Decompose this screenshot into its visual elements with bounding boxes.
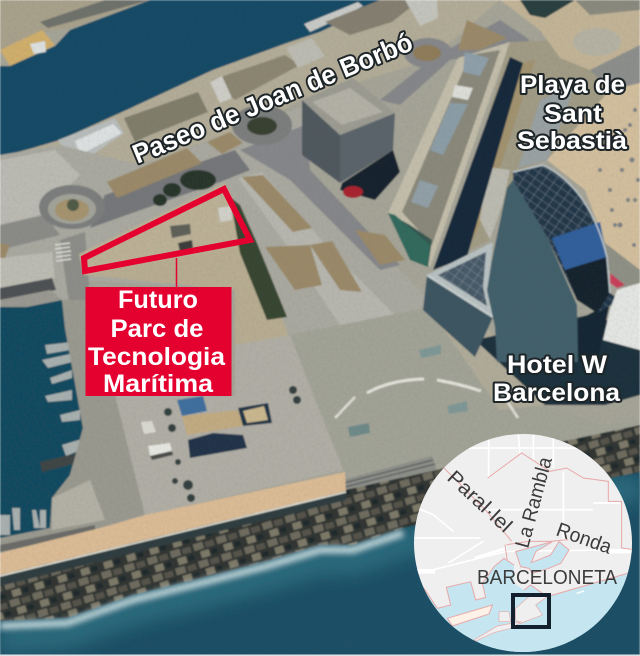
callout leader line (176, 258, 178, 288)
callout: Futuro Parc de Tecnologia Marítima: Parc de (110, 315, 204, 343)
sea wall shadow (0, 492, 346, 586)
callout: Futuro Parc de Tecnologia Marítima: Futuro (118, 286, 198, 314)
label: Playa de Sant Sebastià (517, 71, 627, 155)
callout: Futuro Parc de Tecnologia Marítima: Tecnologia (88, 343, 226, 371)
callout: Futuro Parc de Tecnologia Marítima: Marítima (103, 370, 214, 398)
cube building (302, 78, 400, 200)
long building (388, 42, 523, 270)
map district lines (444, 453, 633, 568)
map location square (513, 595, 549, 627)
label: Hotel W Barcelona: Hotel W (507, 351, 607, 379)
label: Playa de Sant Sebastià: Playa de (520, 71, 625, 99)
stepped ramp (342, 456, 437, 494)
map streets (414, 435, 640, 570)
label: Paseo de Joan de Borbó: Paseo de Joan de Borbó (128, 27, 417, 169)
map label: Paral·lel: Paral·lel (443, 467, 516, 537)
Hotel W podium (423, 242, 640, 405)
future park plot ground (79, 183, 290, 345)
red roof (610, 273, 625, 288)
main plaza (290, 305, 640, 475)
sea (0, 450, 640, 656)
white terrace (603, 283, 640, 350)
promenade (0, 472, 346, 575)
map label: La Rambla: La Rambla (512, 454, 557, 550)
north pier (0, 0, 150, 66)
lower quay (0, 300, 145, 553)
trees near the plot (153, 170, 216, 206)
locator map (414, 434, 640, 655)
label: Hotel W Barcelona: Barcelona (493, 379, 621, 407)
beach (547, 83, 640, 288)
tan planters (0, 20, 507, 292)
harbour water (0, 0, 387, 157)
surf glow (0, 490, 640, 640)
construction site at top right (500, 0, 640, 90)
bottom edge (0, 654, 640, 656)
map water (426, 559, 628, 652)
map label: BARCELONETA: BARCELONETA (477, 567, 618, 589)
label: Hotel W Barcelona (493, 351, 621, 407)
future park plot outline (84, 189, 250, 271)
parking area (115, 335, 345, 515)
palm promenade (445, 40, 640, 262)
waterfront buildings (0, 0, 500, 190)
map label: Ronda: Ronda (553, 519, 615, 559)
label: Playa de Sant Sebastià: Sant (544, 100, 603, 128)
roundabouts (39, 38, 452, 229)
marina water (0, 300, 90, 538)
yacht (304, 2, 363, 32)
label: Playa de Sant Sebastià: Sebastià (517, 127, 627, 155)
callout: Futuro Parc de Tecnologia Marítima (86, 286, 232, 398)
surf foam (0, 533, 403, 626)
pavement and roads (0, 20, 530, 335)
Hotel W tower (487, 165, 620, 362)
rock breakwater (0, 425, 640, 621)
